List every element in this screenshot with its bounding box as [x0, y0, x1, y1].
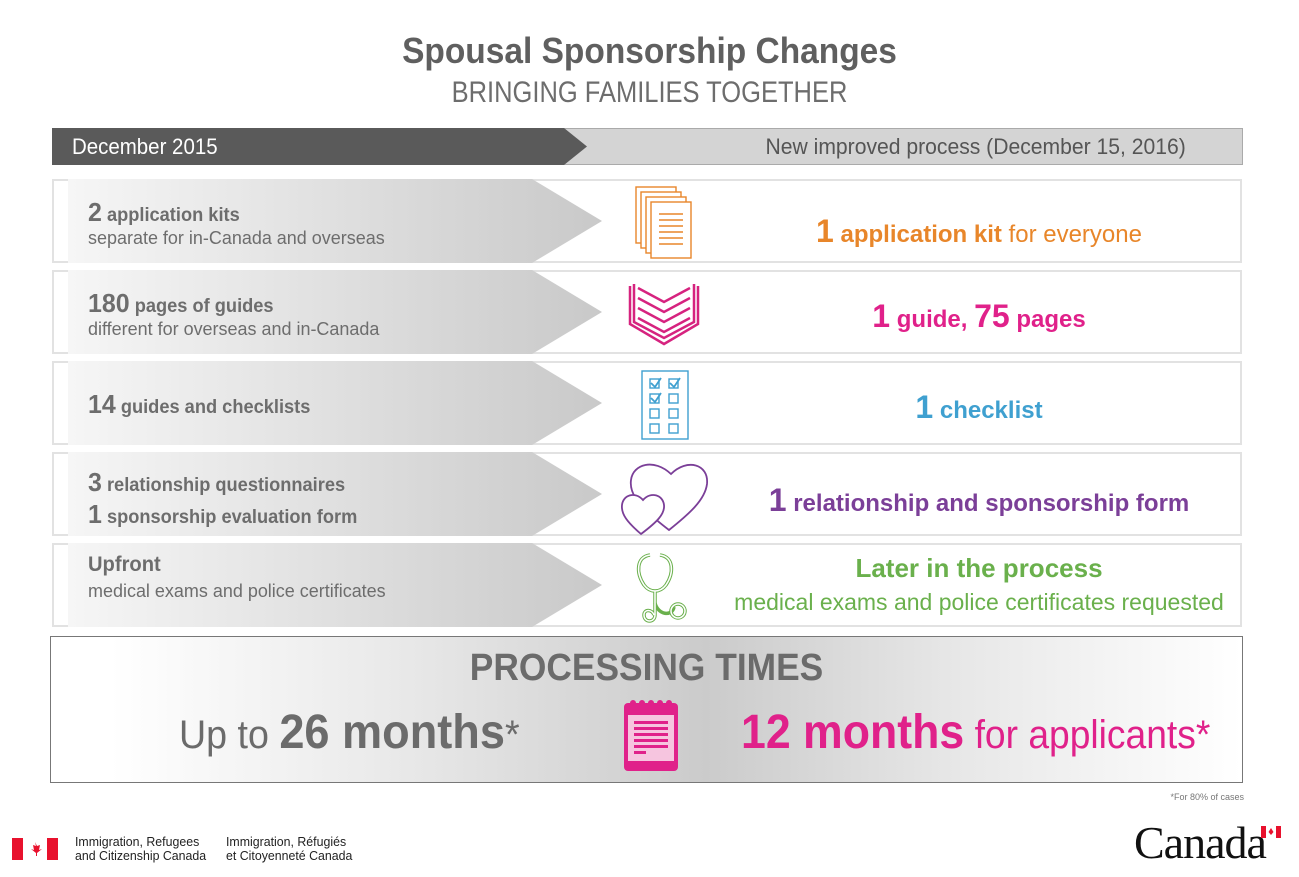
left text 4 [88, 467, 357, 529]
left text 2: 180 pages of guides [88, 288, 274, 318]
left text 1 [88, 197, 385, 248]
header bar [52, 128, 1243, 165]
title: Spousal Sponsorship Changes [402, 30, 897, 71]
text: 12 months: 12 months for applicants* [741, 706, 1210, 759]
icon: hearts [621, 464, 708, 536]
panel: processing times [50, 636, 1243, 783]
row 4 [52, 452, 1242, 536]
subtitle: BRINGING FAMILIES TOGETHER [452, 76, 847, 109]
right text 5 [734, 553, 1224, 615]
icon: flag [12, 838, 58, 860]
right text 2: 1 guide, 75 pages [872, 298, 1086, 334]
row 5 [52, 543, 1242, 627]
right text 4: 1 relationship and sponsorship form [769, 482, 1189, 518]
logo: IRCC: Immigration, Réfugiés [226, 834, 346, 849]
header: new process: New improved process (December 15, 2016) [766, 134, 1186, 159]
right text 1: 1 application kit for everyone [816, 213, 1142, 249]
row 1 [52, 179, 1242, 263]
heading: processing times: PROCESSING TIMES [470, 647, 823, 689]
left text 1: 2 application kits [88, 197, 240, 227]
left text 1: separate for in-Canada and overseas [88, 228, 385, 248]
icon: stethoscope [636, 553, 687, 623]
right text 3: 1 checklist [915, 389, 1043, 425]
logo: IRCC [12, 834, 352, 863]
left text 3: 14 guides and checklists [88, 389, 310, 419]
left text 5 [88, 553, 386, 601]
right text 5: medical exams and police certificates requested [734, 589, 1224, 615]
logo: Canada wordmark: Canada [1134, 817, 1266, 868]
logo: IRCC: and Citizenship Canada [75, 848, 206, 863]
left text 2: different for overseas and in-Canada [88, 319, 379, 339]
icon: book [628, 284, 700, 346]
text: up to 26 months: Up to 26 months* [179, 706, 520, 759]
footnote: *For 80% of cases [1170, 792, 1244, 802]
logo: IRCC: Immigration, Refugees [75, 834, 199, 849]
left text 5: Upfront [88, 553, 161, 576]
left text 2 [88, 288, 380, 339]
header: December 2015 [52, 128, 587, 165]
right text 5: Later in the process [855, 553, 1103, 583]
row 2 [52, 270, 1242, 354]
header: December 2015: December 2015 [72, 134, 218, 159]
icon: checklist [641, 370, 689, 440]
left text 4: 1 sponsorship evaluation form [88, 499, 357, 529]
row 3 [52, 361, 1242, 445]
logo: IRCC: et Citoyenneté Canada [226, 848, 352, 863]
icon: documents [635, 186, 692, 259]
left text 5: medical exams and police certificates [88, 581, 386, 601]
left text 4: 3 relationship questionnaires [88, 467, 345, 497]
icon: calendar [624, 700, 678, 771]
